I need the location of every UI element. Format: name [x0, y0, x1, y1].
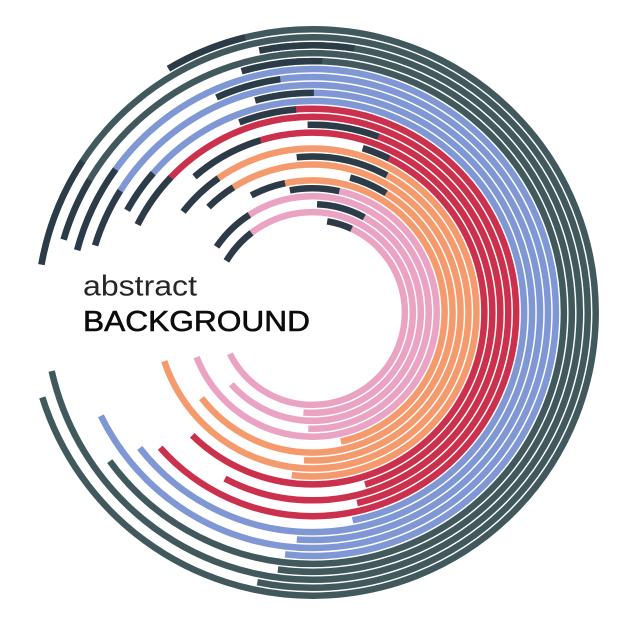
pink ring 3 — [204, 204, 421, 421]
teal ring 4 — [37, 37, 588, 588]
teal ring 2 — [53, 53, 572, 572]
teal ring 3 — [45, 45, 580, 580]
red ring 1 — [141, 141, 484, 484]
red ring 4 — [117, 117, 508, 508]
title: BACKGROUND: BACKGROUND — [83, 306, 310, 338]
blue ring 4 — [77, 77, 548, 548]
orange ring 1 — [180, 180, 445, 445]
ring group: red — [109, 109, 516, 516]
orange ring 3 — [164, 164, 461, 461]
ring group: orange — [149, 149, 476, 476]
blue ring 5 — [69, 69, 556, 556]
red ring 3 — [125, 125, 500, 500]
orange ring 2 — [172, 172, 453, 453]
red ring 2 — [133, 133, 492, 492]
orange ring 5 — [149, 149, 476, 476]
pink ring 1 — [220, 220, 405, 405]
pink ring 2 — [212, 212, 413, 413]
ring group: pink — [188, 188, 437, 437]
blue ring 2 — [93, 93, 532, 532]
ring group: blue — [69, 69, 556, 556]
pink ring 4 — [196, 196, 429, 429]
teal ring 1 — [61, 61, 564, 564]
orange ring 4 — [156, 156, 468, 468]
pink ring 5 — [188, 188, 437, 437]
blue ring 1 — [101, 101, 524, 524]
title: abstract: abstract — [83, 270, 197, 302]
blue ring 3 — [85, 85, 540, 540]
red ring 5 — [109, 109, 516, 516]
